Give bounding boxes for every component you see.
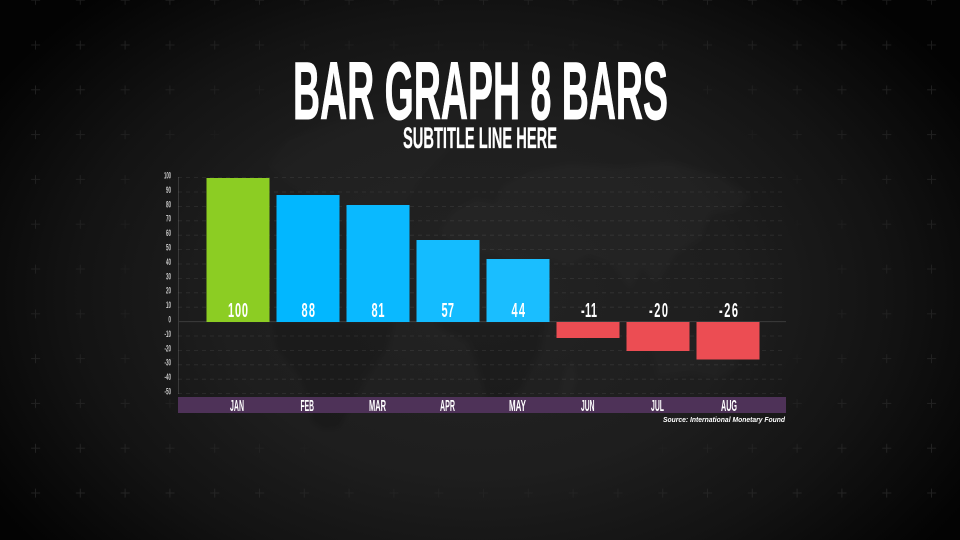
value labels: 44 <box>512 300 525 322</box>
source note: Source: International Monetary Found <box>663 417 786 424</box>
value labels: -20 <box>649 300 668 322</box>
chart: -30 <box>164 358 171 368</box>
text: SUBTITLE LINE HERE <box>403 122 557 155</box>
chart: 70 <box>166 214 171 224</box>
value labels: 100 <box>228 300 248 322</box>
chart: 90 <box>166 185 171 195</box>
chart: 100 <box>164 170 171 180</box>
bar: Mar <box>346 205 410 322</box>
chart: -10 <box>164 329 171 339</box>
bar: Feb <box>276 195 340 322</box>
month labels: JAN <box>230 398 244 415</box>
chart: 50 <box>166 242 171 252</box>
chart: 40 <box>166 257 171 267</box>
chart: 20 <box>166 286 171 296</box>
month labels: MAY <box>509 398 526 415</box>
month labels <box>230 398 737 415</box>
bar: Jan <box>206 178 270 322</box>
month labels: JUN <box>581 398 594 415</box>
grid lines <box>178 178 786 394</box>
value labels: -11 <box>581 300 597 322</box>
value labels: 88 <box>302 300 315 322</box>
value labels <box>228 300 738 322</box>
month labels: APR <box>440 398 455 415</box>
month band <box>178 397 786 413</box>
chart: -40 <box>164 372 171 382</box>
bar: Jun <box>556 322 620 338</box>
y axis labels <box>164 170 171 396</box>
chart: -50 <box>164 386 171 396</box>
bar: Jul <box>626 322 690 351</box>
value labels: 57 <box>442 300 454 322</box>
world map backdrop <box>268 113 750 430</box>
y axis labels: 0 <box>168 314 171 324</box>
value labels: 81 <box>372 300 385 322</box>
bar: Aug <box>696 322 760 360</box>
chart: 10 <box>166 300 171 310</box>
chart: -20 <box>164 343 171 353</box>
month labels: FEB <box>300 398 314 415</box>
chart: 80 <box>166 199 171 209</box>
chart: 60 <box>166 228 171 238</box>
month labels: JUL <box>651 398 664 415</box>
value labels: -26 <box>719 300 738 322</box>
month labels: MAR <box>369 398 386 415</box>
chart: 30 <box>166 271 171 281</box>
chart <box>164 170 786 424</box>
bar: Apr <box>416 240 480 322</box>
axis lines <box>178 177 786 394</box>
chart: AUG <box>721 398 737 415</box>
bar: May <box>486 259 550 322</box>
